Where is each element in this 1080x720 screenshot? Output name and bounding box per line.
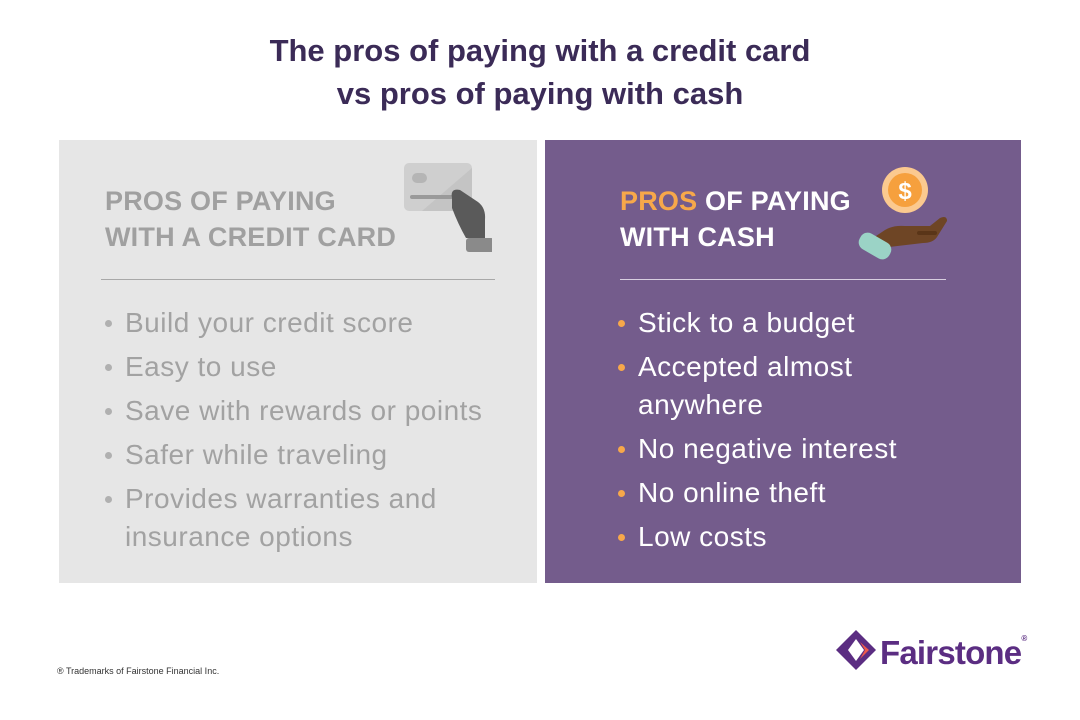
list: credit card pros: Safer while traveling [125,439,388,470]
heading: credit card: WITH A CREDIT CARD [105,222,396,252]
divider [620,279,946,280]
list: credit card pros: Provides warranties and insurance options [125,483,437,552]
icon: hand with card [404,163,492,252]
divider [101,279,495,280]
heading: cash: PROS OF PAYING [620,186,851,216]
list: credit card pros: Build your credit score [125,307,414,338]
heading: cash: WITH CASH [620,222,775,252]
heading: credit card: PROS OF PAYING [105,186,336,216]
heading: cash [620,186,851,252]
list: cash pros: No negative interest [638,433,897,464]
panel: credit card [59,140,537,583]
icon: hand with coin [858,167,947,260]
list: cash pros: Accepted almost anywhere [638,351,852,420]
list: cash pros: Low costs [638,521,767,552]
list: cash pros [618,307,897,552]
logo: Fairstone: Fairstone® [880,634,1026,671]
icon: hand with coin: $ [898,178,912,205]
list: credit card pros: Save with rewards or points [125,395,482,426]
list: credit card pros: Easy to use [125,351,277,382]
footnote: ® Trademarks of Fairstone Financial Inc. [57,666,219,676]
title: vs pros of paying with cash [337,76,743,111]
list: credit card pros [105,307,482,552]
list: cash pros: No online theft [638,477,826,508]
panel: cash [545,140,1021,583]
title [270,33,810,111]
heading: credit card [105,186,396,252]
logo: Fairstone [836,630,1028,671]
list: cash pros: Stick to a budget [638,307,855,338]
title: The pros of paying with a credit card [270,33,810,68]
